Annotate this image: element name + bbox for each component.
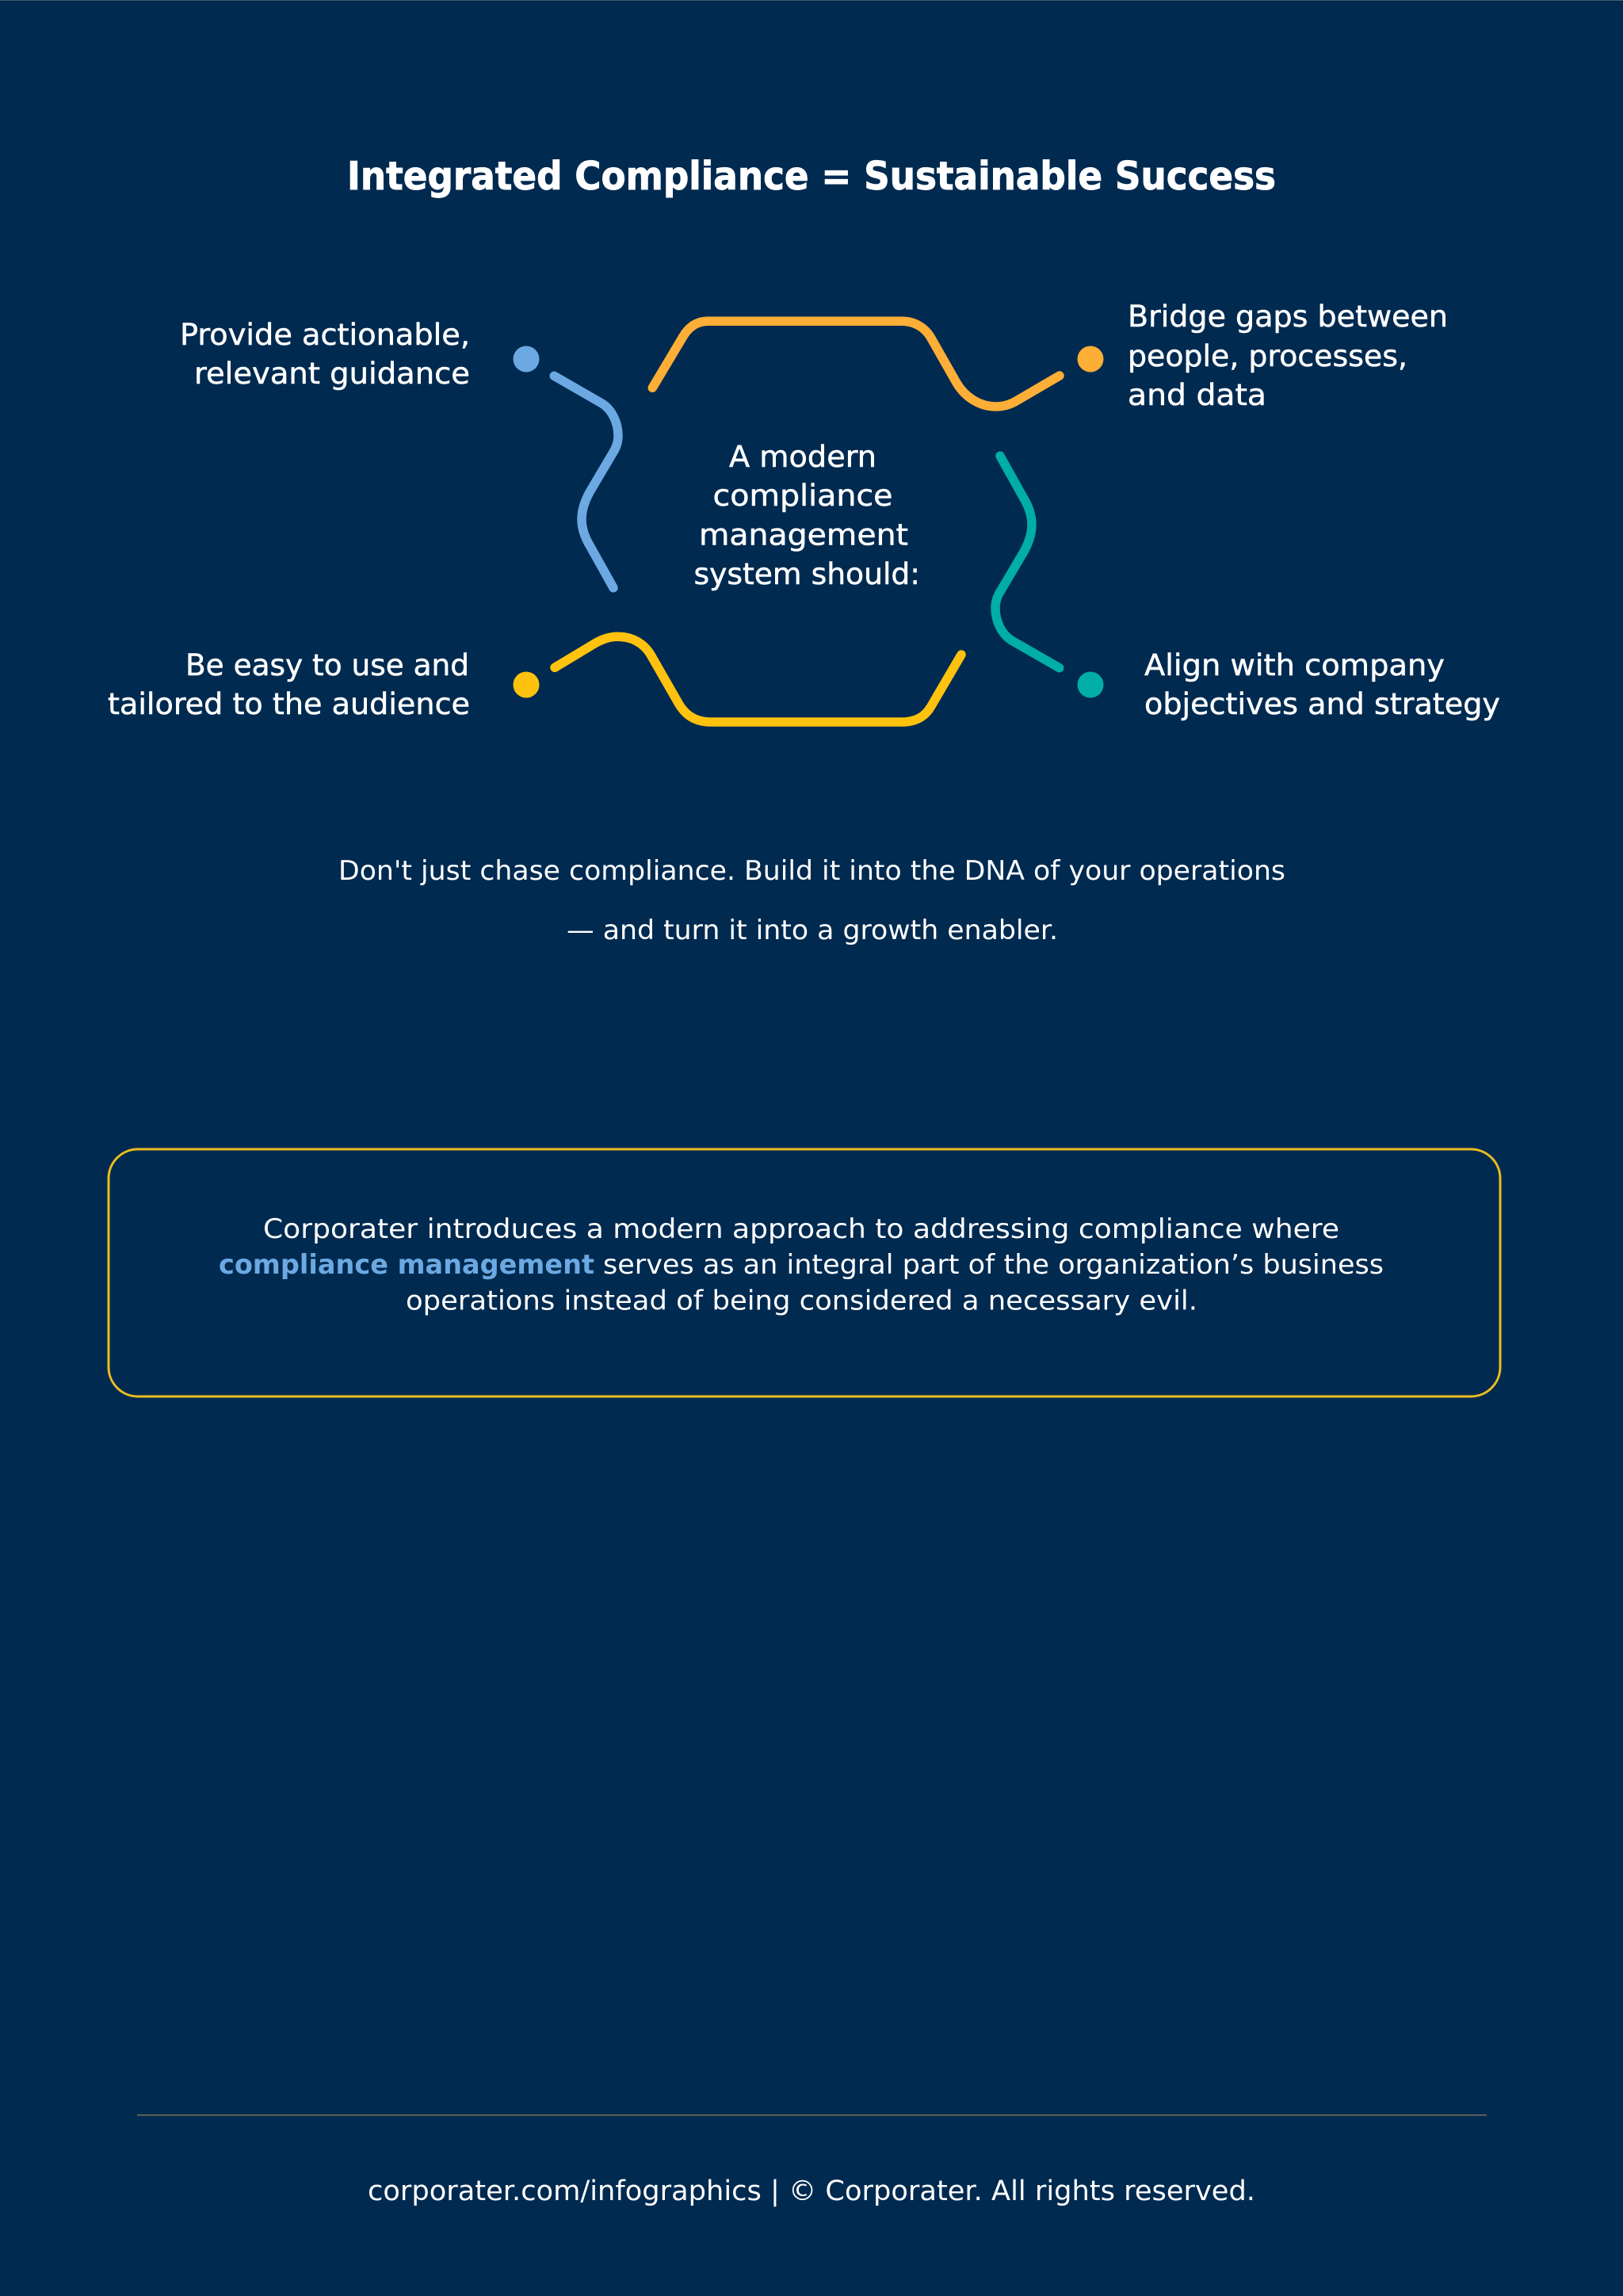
callout text: Corporater introduces a modern approach to addressing compliance where <box>263 1213 1339 1245</box>
connector and dot: teal <box>995 456 1103 697</box>
label: bottom left <box>108 648 470 721</box>
callout panel <box>109 1149 1500 1396</box>
callout text <box>219 1213 1384 1317</box>
center text: management <box>699 518 908 552</box>
center text <box>694 440 920 591</box>
label: top left: relevant guidance <box>194 357 470 391</box>
footer text: corporater.com/infographics | © Corporater. All rights reserved. <box>368 2176 1255 2207</box>
connector and dot: blue <box>514 346 618 588</box>
tagline text: Don't just chase compliance. Build it into the DNA of your operations <box>338 855 1285 887</box>
label: top right <box>1128 300 1448 412</box>
label: bottom left: tailored to the audience <box>108 687 470 721</box>
label: top right: Bridge gaps between <box>1128 300 1448 334</box>
connector and dot: yellow <box>514 636 961 722</box>
label: top left <box>180 318 470 391</box>
callout text: compliance management <box>219 1249 594 1281</box>
callout text: operations instead of being considered a necessary evil. <box>406 1286 1197 1317</box>
center text: system should: <box>694 557 920 591</box>
label: bottom left: Be easy to use and <box>185 648 469 682</box>
label: bottom right <box>1144 648 1500 721</box>
tagline text <box>338 855 1285 946</box>
callout text: serves as an integral part of the organization’s business <box>603 1249 1384 1281</box>
tagline text: — and turn it into a growth enabler. <box>567 915 1058 946</box>
center text: compliance <box>713 479 892 513</box>
label: bottom right: Align with company <box>1144 648 1445 682</box>
label: top right: and data <box>1128 378 1266 412</box>
connector and dot: orange <box>652 321 1103 407</box>
label: top right: people, processes, <box>1128 339 1407 373</box>
label: bottom right: objectives and strategy <box>1144 687 1500 721</box>
title: Integrated Compliance = Sustainable Success <box>347 154 1276 199</box>
diagram: compliance management system <box>108 300 1500 722</box>
center text: A modern <box>729 440 876 474</box>
label: top left: Provide actionable, <box>180 318 470 352</box>
